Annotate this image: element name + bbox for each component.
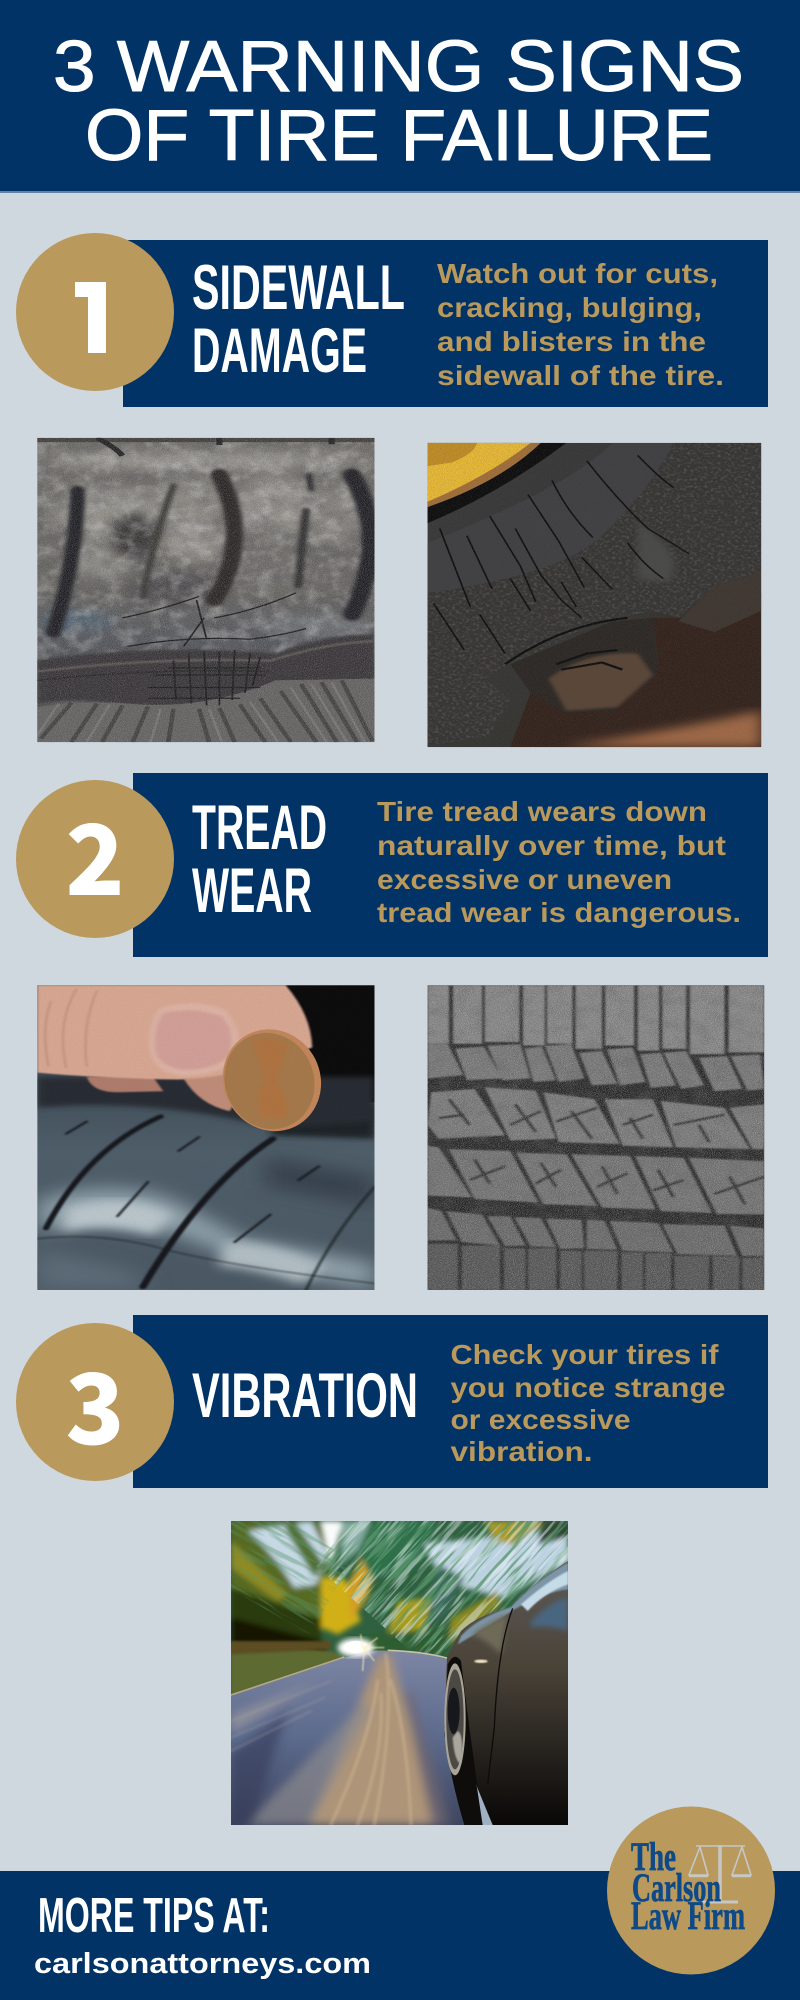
- description: vibration: [450, 1339, 726, 1467]
- logo wordmark: The: [631, 1834, 676, 1879]
- logo wordmark: Law Firm: [631, 1893, 745, 1938]
- footer url: carlsonattorneys.com: [34, 1948, 371, 1980]
- description: sidewall damage: and blisters in the: [437, 326, 706, 357]
- photo: worn black and white tread blocks: [428, 985, 764, 1290]
- car body: [444, 1561, 568, 1825]
- photo: penny test on worn tread: [37, 985, 378, 1290]
- grass verge: [231, 1643, 344, 1696]
- description: tread wear: naturally over time, but: [377, 830, 726, 861]
- number badge 2: [16, 780, 174, 938]
- icon: scales of justice: [689, 1845, 751, 1902]
- logo wordmark: [631, 1834, 745, 1938]
- description: sidewall damage: cracking, bulging,: [437, 292, 702, 323]
- tread blocks row 6: [428, 1244, 764, 1290]
- tread blocks row 2: [428, 1044, 764, 1091]
- headlight: [338, 1634, 384, 1671]
- number badge 1: [16, 233, 174, 391]
- blurred forest: [231, 1521, 568, 1654]
- photo: cracked torn tire on yellow wheel: [428, 443, 761, 747]
- panel: section 1 header: [16, 233, 768, 407]
- description: vibration: or excessive: [450, 1404, 630, 1435]
- description: sidewall damage: sidewall of the tire.: [437, 360, 724, 391]
- description: sidewall damage: [437, 258, 724, 391]
- title banner: [0, 0, 800, 193]
- front wheel: [444, 1663, 466, 1775]
- photo: car driving fast, motion blur: [231, 1521, 568, 1825]
- tread surface texture: [428, 443, 761, 747]
- footer heading: MORE TIPS AT:: [38, 1889, 270, 1943]
- heading: vibration: VIBRATION: [192, 1361, 418, 1431]
- ground: [510, 593, 761, 747]
- number badge 1: 1: [64, 240, 124, 381]
- description: tread wear: Tire tread wears down: [377, 796, 707, 827]
- tread blocks row 5: [428, 1208, 764, 1256]
- panel: section 3 header: [16, 1315, 768, 1488]
- tread blocks row 4: [428, 1146, 764, 1215]
- heading: tread wear: [192, 793, 327, 926]
- heading: tread wear: TREAD: [192, 793, 327, 863]
- number badge 2: 2: [65, 782, 125, 923]
- heading: sidewall damage: DAMAGE: [192, 316, 367, 386]
- description: vibration: vibration.: [450, 1436, 592, 1467]
- title: OF TIRE FAILURE: [85, 96, 713, 176]
- frayed tread: [428, 443, 761, 747]
- description: tread wear: [377, 796, 741, 928]
- footer band: [0, 1871, 800, 2000]
- motion streak texture, upper right: [231, 1521, 568, 1655]
- title: [53, 27, 744, 176]
- wheel rim: [428, 443, 566, 523]
- number badge 3: [16, 1323, 174, 1481]
- description: vibration: you notice strange: [450, 1372, 726, 1403]
- number badge 3: 3: [65, 1331, 125, 1472]
- logo wordmark: Carlson: [632, 1865, 721, 1910]
- description: tread wear: excessive or uneven: [377, 864, 672, 895]
- heading: sidewall damage: [192, 253, 405, 386]
- tread blocks row 1: [428, 985, 764, 1054]
- worn tread lighter bands: [37, 1156, 374, 1290]
- hanging tire chunk: [510, 618, 658, 712]
- fingers: [37, 985, 312, 1111]
- heading: sidewall damage: SIDEWALL: [192, 253, 405, 323]
- description: tread wear: tread wear is dangerous.: [377, 897, 741, 928]
- tan road streaks: [231, 1654, 451, 1825]
- road: [231, 1650, 471, 1825]
- heading: tread wear: WEAR: [192, 856, 312, 926]
- photo: cracked dusty tire sidewall: [36, 438, 374, 742]
- penny: [222, 1029, 322, 1132]
- panel: section 2 header: [16, 773, 768, 957]
- title: 3 WARNING SIGNS: [53, 27, 744, 107]
- logo badge: [607, 1806, 775, 1974]
- description: sidewall damage: Watch out for cuts,: [437, 258, 718, 289]
- tread blocks row 3: [428, 1087, 764, 1149]
- description: vibration: Check your tires if: [450, 1339, 719, 1370]
